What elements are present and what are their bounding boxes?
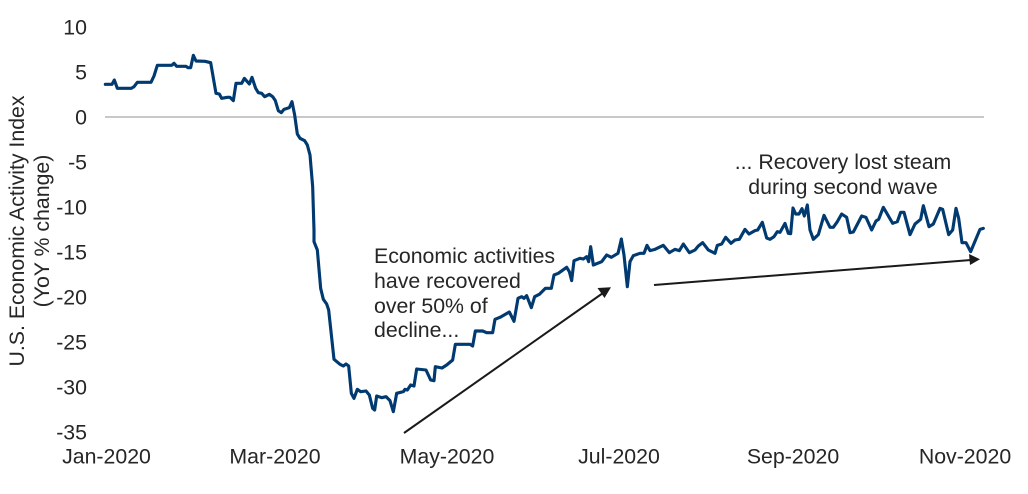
y-axis tick labels — [56, 16, 87, 444]
y-axis tick labels: -30 — [56, 376, 87, 400]
callout: lost steam text: ... Recovery lost steam — [735, 150, 951, 174]
y-axis tick labels: 0 — [75, 106, 87, 130]
callout: recovery text: Economic activities — [374, 244, 555, 268]
x-axis tick labels: Sep-2020 — [747, 444, 839, 468]
y-axis tick labels: -25 — [56, 330, 87, 354]
x-axis tick labels: Mar-2020 — [229, 444, 321, 468]
callout: recovery text: have recovered — [374, 269, 521, 293]
y-axis tick labels: -35 — [56, 420, 87, 444]
x-axis tick labels: Jan-2020 — [62, 444, 151, 468]
y-axis tick labels: 5 — [75, 60, 87, 84]
y-axis tick labels: -5 — [68, 150, 87, 174]
callout: lost steam text: during second wave — [748, 175, 938, 199]
arrow: slowing trend — [654, 254, 980, 285]
callout: recovery text: over 50% of — [374, 294, 488, 318]
x-axis tick labels: Jul-2020 — [578, 444, 660, 468]
y-axis tick labels: 10 — [63, 16, 87, 40]
arrow: recovery trend — [404, 287, 611, 433]
y-axis tick labels: -15 — [56, 240, 87, 264]
y-axis tick labels: -10 — [56, 196, 87, 220]
x-axis tick labels: Nov-2020 — [919, 444, 1011, 468]
y-axis title: (YoY % change) — [30, 155, 54, 307]
data series line — [105, 55, 983, 412]
callout: recovery text: decline... — [374, 318, 459, 342]
y-axis title: U.S. Economic Activity Index — [5, 95, 29, 367]
y-axis tick labels: -20 — [56, 286, 87, 310]
x-axis tick labels: May-2020 — [400, 444, 495, 468]
x-axis tick labels — [62, 444, 1011, 468]
